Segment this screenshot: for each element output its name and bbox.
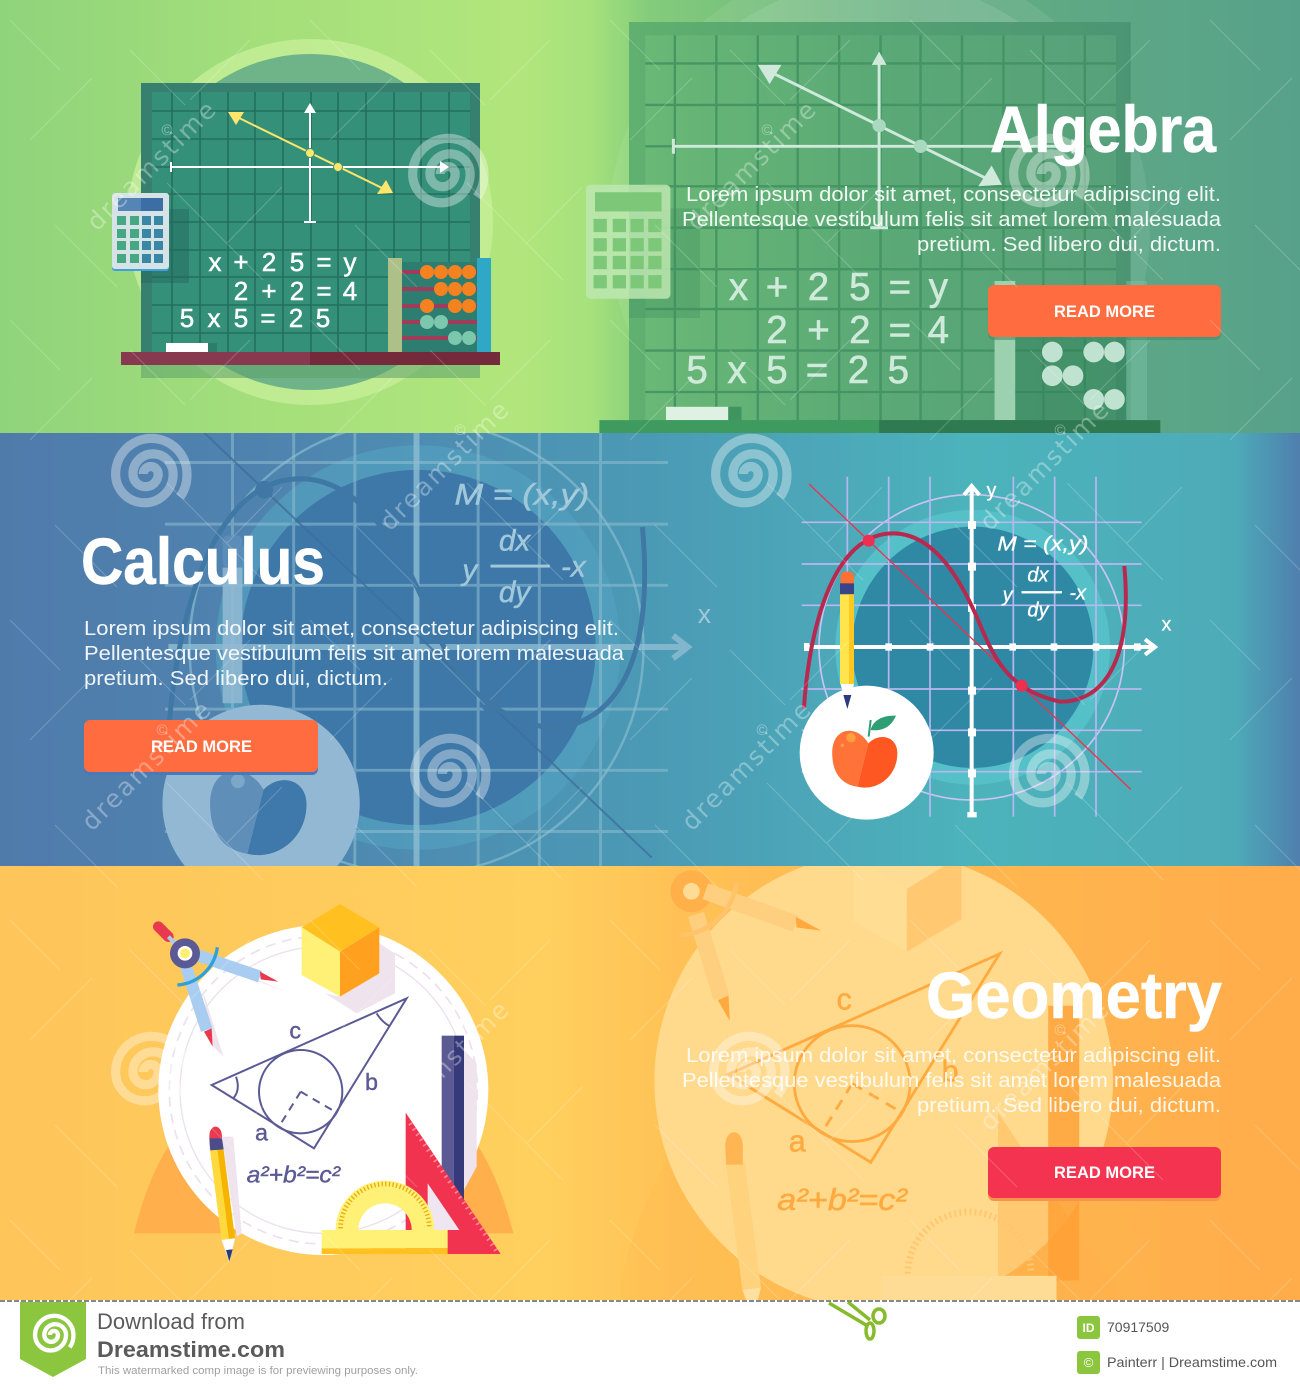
panel: geometry [0, 866, 1300, 1300]
calculator [112, 193, 189, 283]
formulas [997, 534, 1088, 622]
geometry body text: Lorem ipsum dolor sit amet, consectetur adipiscing elit. [686, 1044, 1221, 1067]
pencil [209, 1127, 242, 1262]
calculus body text: Pellentesque vestibulum felis sit amet lorem malesuada [84, 642, 625, 665]
watermark copyright marks: © [454, 422, 466, 439]
axes [171, 103, 449, 222]
algebra illustration: chalkboard [112, 39, 500, 405]
formulas: dy [1027, 600, 1049, 622]
yellow line [228, 112, 393, 194]
button: geometry read more: READ MORE [1054, 1163, 1155, 1182]
backdrop circles [819, 495, 1124, 800]
watermark text: dreamstime [681, 96, 821, 236]
algebra body text [682, 183, 1222, 256]
button: geometry read more [988, 1147, 1221, 1201]
author badge: © [1084, 1355, 1094, 1370]
ghost enlarged geometry illustration [654, 866, 1113, 1300]
ghost enlarged calculus illustration: -x [561, 550, 587, 583]
button: algebra read more [988, 285, 1221, 340]
logo ribbon [20, 1302, 86, 1377]
button: calculus read more: READ MORE [151, 737, 252, 756]
download text: Dreamstime.com [97, 1337, 285, 1362]
watermark spirals [116, 138, 1085, 1101]
calculus body text: pretium. Sed libero dui, dictum. [84, 667, 388, 690]
ruler [442, 1036, 477, 1233]
panel: calculus [0, 433, 1300, 866]
ghost enlarged algebra illustration: 2 + 2 = 4 [766, 309, 949, 352]
algebra body text: Lorem ipsum dolor sit amet, consectetur adipiscing elit. [686, 183, 1221, 206]
author badge: Painterr | Dreamstime.com [1107, 1354, 1277, 1370]
white circle [158, 925, 488, 1255]
pencil [840, 572, 854, 695]
cube [302, 904, 395, 1013]
watermark copyright marks: © [1054, 422, 1066, 439]
axis labels: y [987, 481, 997, 502]
board shadow [141, 365, 480, 378]
ghost enlarged geometry illustration: a²+b²=c² [777, 1183, 909, 1217]
chalk [166, 343, 217, 352]
formulas: -x [1069, 582, 1087, 604]
watermark copyright marks: © [161, 122, 173, 139]
protractor [322, 1181, 448, 1254]
tangent line [809, 484, 1131, 789]
axis labels [987, 481, 1172, 636]
button: calculus read more [84, 720, 318, 775]
algebra body text: Pellentesque vestibulum felis sit amet lorem malesuada [682, 208, 1222, 231]
set square [406, 1113, 501, 1254]
watermark copyright marks: © [454, 1022, 466, 1039]
axis labels: x [1162, 615, 1172, 636]
download text [97, 1309, 418, 1377]
triangle labels and formula: a²+b²=c² [247, 1162, 341, 1188]
graph grid [802, 477, 1142, 817]
backdrop circle [127, 39, 493, 405]
ghost enlarged calculus illustration [162, 433, 711, 866]
download text: Download from [97, 1309, 245, 1334]
watermark text [76, 96, 1114, 1136]
geometry body text: pretium. Sed libero dui, dictum. [917, 1094, 1221, 1117]
equations: 5 x 5 = 2 5 [180, 303, 330, 333]
formulas: dx [1027, 565, 1049, 587]
geometry background [0, 866, 1300, 1300]
calculus background [0, 433, 1300, 866]
ghost enlarged calculus illustration: M = (x,y) [454, 478, 589, 511]
watermark copyright marks: © [761, 122, 773, 139]
watermark text: dreamstime [374, 396, 514, 536]
triangle with inscribed circle [212, 998, 407, 1148]
board grid [152, 92, 470, 352]
author badge [1077, 1351, 1277, 1374]
equations: x + 2 5 = y [208, 247, 356, 277]
ghost enlarged algebra illustration: 5 x 5 = 2 5 [686, 349, 909, 392]
download text: This watermarked comp image is for previewing purposes only. [98, 1365, 418, 1377]
ghost enlarged algebra illustration [586, 0, 1160, 433]
watermark text: dreamstime [76, 696, 216, 836]
geometry illustration: tools [134, 904, 513, 1262]
heading: Geometry: Geometry [926, 958, 1222, 1032]
ghost enlarged geometry illustration: b [942, 1054, 959, 1088]
heading: Algebra: Algebra [990, 92, 1217, 166]
algebra body text: pretium. Sed libero dui, dictum. [917, 233, 1221, 256]
curve [804, 533, 1126, 708]
equations [180, 252, 357, 328]
watermark text: dreamstime [974, 996, 1114, 1136]
ghost enlarged calculus illustration: x [698, 599, 712, 629]
ghost enlarged calculus illustration: dy [499, 576, 532, 609]
abacus [388, 258, 491, 352]
compass [158, 927, 287, 1057]
board [141, 83, 480, 352]
triangle labels and formula: c [289, 1017, 301, 1043]
algebra background [0, 0, 1300, 433]
calculus illustration: function graph [800, 477, 1172, 820]
apple badge [800, 686, 934, 820]
ghost enlarged geometry illustration: a [789, 1125, 806, 1159]
watermark text: dreamstime [374, 996, 514, 1136]
watermark copyright marks [156, 122, 1066, 1039]
points [863, 535, 1028, 692]
ghost enlarged calculus illustration: y [460, 554, 479, 587]
watermark copyright marks: © [756, 722, 768, 739]
panel: algebra [0, 0, 1300, 433]
triangle labels and formula: b [365, 1069, 378, 1095]
shelf [121, 352, 500, 365]
triangle labels and formula: a [255, 1120, 268, 1146]
ghost enlarged calculus illustration: dx [499, 524, 531, 557]
formulas: y [1001, 585, 1014, 607]
footer [0, 1300, 1300, 1390]
formulas: M = (x,y) [997, 534, 1088, 556]
watermark copyright marks: © [1054, 1022, 1066, 1039]
ghost enlarged geometry illustration: c [836, 982, 852, 1016]
geometry body text [682, 1044, 1222, 1117]
icon: scissors [829, 1302, 885, 1339]
backdrop mound [134, 1143, 513, 1233]
id badge [1077, 1316, 1170, 1339]
watermark text: dreamstime [974, 396, 1114, 536]
calculus body text: Lorem ipsum dolor sit amet, consectetur adipiscing elit. [84, 617, 619, 640]
equations: 2 + 2 = 4 [234, 276, 357, 306]
id badge: 70917509 [1107, 1319, 1170, 1335]
heading: Calculus: Calculus [81, 524, 325, 598]
ghost enlarged algebra illustration: x + 2 5 = y [729, 266, 949, 309]
watermark copyright marks: © [156, 722, 168, 739]
triangle labels and formula [247, 1017, 378, 1188]
watermark text: dreamstime [676, 696, 816, 836]
watermark text: dreamstime [81, 96, 221, 236]
id badge: ID [1082, 1321, 1095, 1335]
calculus body text [84, 617, 625, 690]
button: algebra read more: READ MORE [1054, 302, 1155, 321]
axes [804, 486, 1155, 817]
geometry body text: Pellentesque vestibulum felis sit amet lorem malesuada [682, 1069, 1222, 1092]
